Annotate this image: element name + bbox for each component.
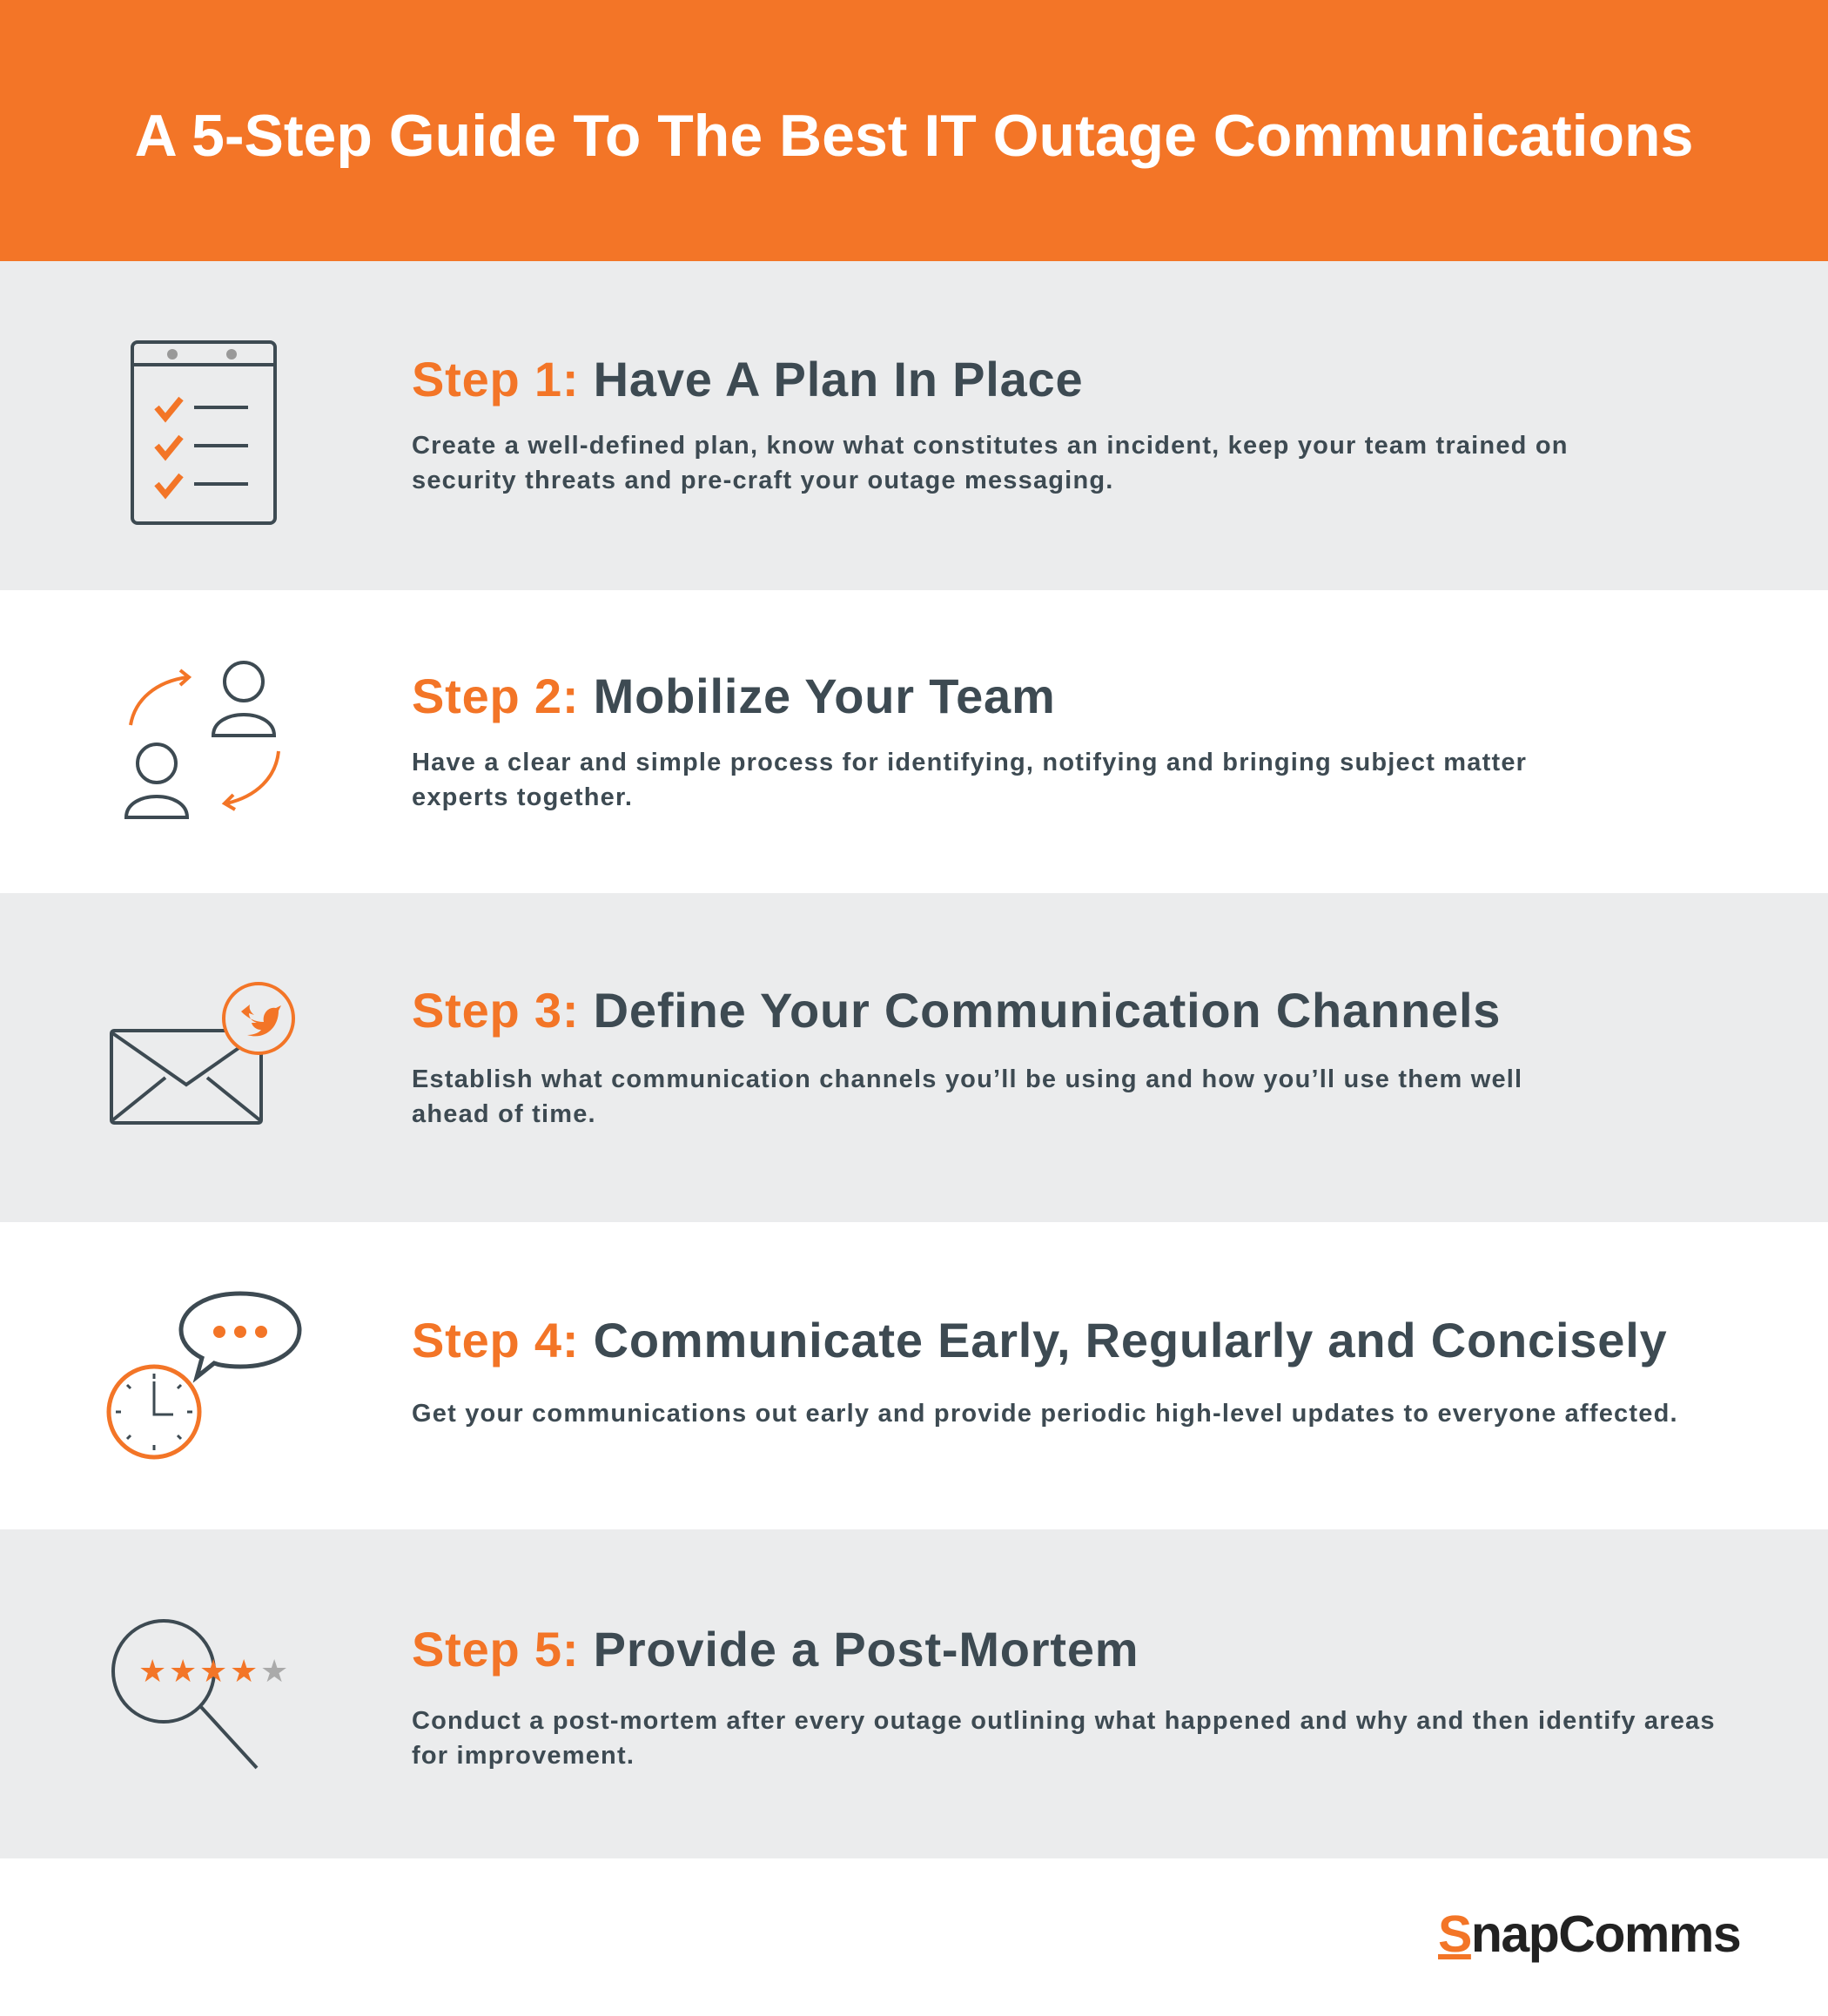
text: Conduct a post-mortem after every outage outlining what happened and why and then identify areas xyxy=(412,1707,1716,1735)
icon: magnifier with stars: ★ xyxy=(230,1654,258,1690)
text: Establish what communication channels you’ll be using and how you’ll use them well xyxy=(412,1065,1522,1093)
panel: step 2 xyxy=(124,661,1527,819)
icon: team xyxy=(124,661,280,819)
header banner xyxy=(0,0,1828,261)
text xyxy=(412,1707,1716,1770)
icon: magnifier with stars: ★ xyxy=(199,1654,227,1690)
text: Have a clear and simple process for identifying, notifying and bringing subject matter xyxy=(412,749,1527,776)
heading: Step 2: Mobilize Your Team xyxy=(412,669,1056,723)
logo: SnapComms xyxy=(1438,1905,1740,1963)
text: for improvement. xyxy=(412,1742,635,1770)
panel: step 5 xyxy=(0,1529,1828,1858)
text xyxy=(412,1065,1522,1128)
text xyxy=(412,749,1527,811)
icon: magnifier with stars: ★ xyxy=(260,1654,288,1690)
text: Get your communications out early and provide periodic high-level updates to everyone affected. xyxy=(412,1400,1678,1428)
icon: clock and speech bubble xyxy=(106,1292,301,1459)
panel: step 1 xyxy=(0,261,1828,590)
text: ahead of time. xyxy=(412,1100,596,1128)
panel: step 3 xyxy=(0,893,1828,1222)
panel: step 4 xyxy=(106,1292,1678,1459)
heading: Step 3: Define Your Communication Channels xyxy=(412,983,1501,1038)
icon: checklist xyxy=(131,340,277,525)
text: experts together. xyxy=(412,783,633,811)
heading: Step 1: Have A Plan In Place xyxy=(412,352,1083,407)
text: security threats and pre-craft your outage messaging. xyxy=(412,467,1114,494)
text xyxy=(412,432,1569,494)
icon: envelope with twitter xyxy=(110,982,295,1125)
title: A 5-Step Guide To The Best IT Outage Communications xyxy=(135,103,1693,169)
icon: magnifier with stars xyxy=(111,1619,288,1769)
icon: magnifier with stars: ★ xyxy=(138,1654,166,1690)
text: Create a well-defined plan, know what constitutes an incident, keep your team trained on xyxy=(412,432,1569,460)
heading: Step 5: Provide a Post-Mortem xyxy=(412,1622,1139,1677)
icon: magnifier with stars: ★ xyxy=(169,1654,197,1690)
heading: Step 4: Communicate Early, Regularly and Concisely xyxy=(412,1313,1668,1368)
